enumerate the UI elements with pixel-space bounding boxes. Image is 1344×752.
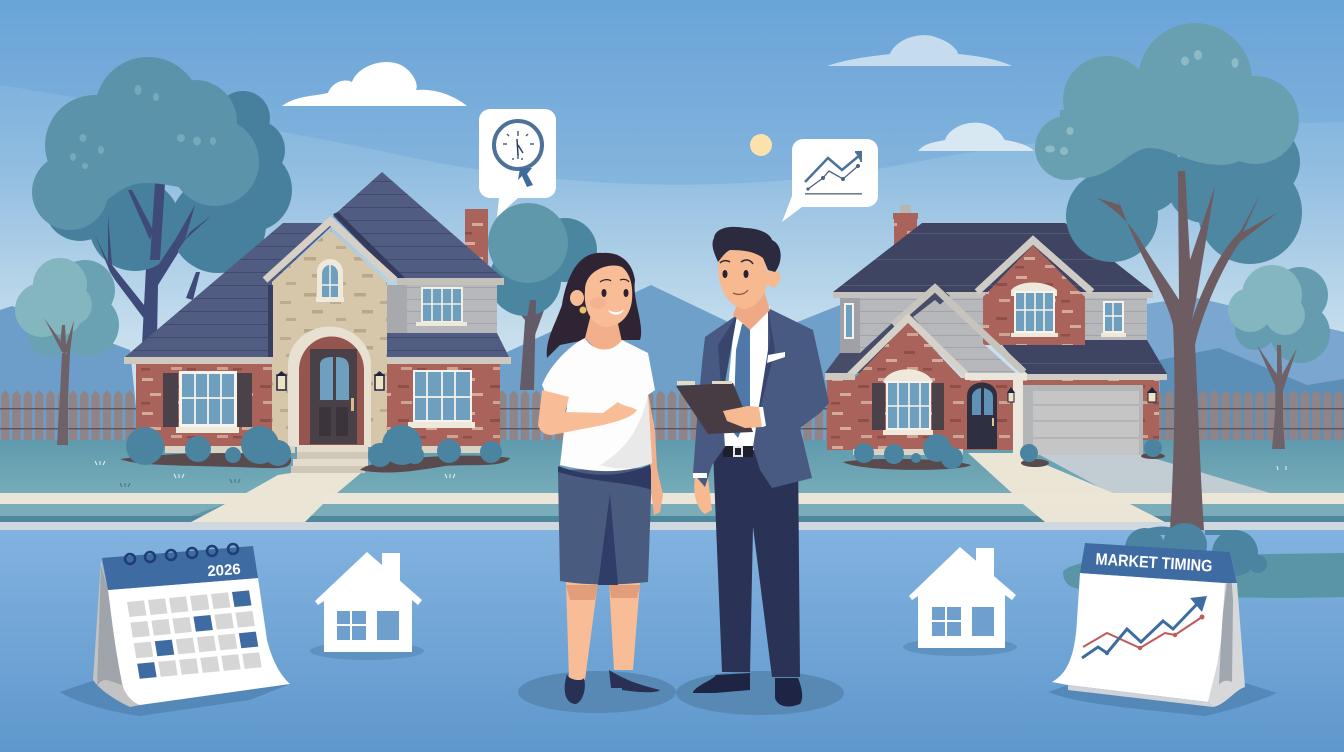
tree: behind couple (488, 203, 597, 390)
speech bubble: trend chart (782, 139, 878, 222)
grass tufts (95, 461, 1286, 487)
icon: house left (310, 552, 424, 660)
calendar year label: 2026 (207, 561, 241, 580)
right house door (967, 382, 997, 449)
woman arm right (642, 393, 663, 515)
calendar date grid (127, 590, 262, 679)
market calendar chart (1082, 596, 1207, 658)
woman arm and hand (538, 390, 637, 435)
market calendar title: MARKET TIMING (1095, 550, 1213, 576)
sun (750, 134, 772, 156)
woman (538, 253, 663, 704)
calendar back fold (93, 560, 140, 707)
shadow patch and bushes behind market calendar (1063, 523, 1344, 598)
calendar rings (125, 544, 238, 564)
man shirt and belt (722, 306, 770, 457)
right house upper window (1011, 282, 1058, 337)
market calendar shadow (1048, 683, 1277, 716)
fences (0, 390, 1344, 440)
calendar header (102, 546, 258, 590)
woman skirt (558, 464, 652, 585)
man shoes (693, 673, 802, 706)
tree: small left (15, 258, 119, 445)
woman t-shirt (542, 338, 655, 471)
left house window lower right (408, 370, 475, 428)
tree: large right (1035, 23, 1302, 535)
clouds (282, 35, 1034, 151)
left house window upper right (416, 287, 467, 326)
left house window upper arch (316, 259, 344, 302)
woman neck and head (570, 254, 632, 352)
house: right (825, 205, 1167, 455)
woman shoes (565, 670, 660, 704)
house: left (124, 172, 511, 473)
sky background (0, 0, 1344, 540)
shrubs and mulch beds (120, 425, 1165, 473)
left house lanterns (276, 371, 385, 390)
man head (713, 227, 781, 330)
couple shadow (518, 671, 844, 715)
market calendar page (1052, 573, 1225, 702)
right house lanterns (1007, 387, 1157, 402)
calendar page (108, 578, 290, 705)
market timing calendar (1048, 543, 1277, 716)
market calendar back fold (1208, 552, 1245, 707)
driveway and walkways (968, 453, 1270, 522)
calendar 2026 (60, 544, 290, 716)
man clipboard (676, 381, 753, 434)
man hand right (723, 406, 763, 428)
right house side window (1101, 301, 1126, 337)
woman legs (566, 582, 640, 680)
mountains (0, 285, 1344, 445)
man trousers (713, 450, 800, 677)
tree: small right (1228, 265, 1330, 449)
left house arched entry and door (288, 327, 371, 447)
foreground ground (0, 530, 1344, 752)
sidewalk and curb (0, 473, 1344, 530)
market calendar header (1080, 543, 1237, 583)
icon: clock with cursor (494, 121, 542, 187)
right house small side window (844, 303, 854, 339)
right house lower window (872, 369, 944, 435)
woman hair back (547, 253, 641, 358)
man (676, 227, 829, 706)
man hand left (694, 478, 712, 514)
icon: trend lines (805, 152, 862, 195)
lawn (0, 440, 1344, 496)
icon: house right (903, 547, 1017, 656)
garage door (1023, 385, 1143, 455)
left house window lower left (163, 371, 252, 433)
tree: large left (32, 57, 292, 345)
speech bubble: clock (479, 109, 556, 217)
man tie (733, 323, 750, 438)
left house steps (291, 445, 368, 473)
man jacket (693, 308, 829, 488)
calendar shadow (60, 680, 290, 716)
